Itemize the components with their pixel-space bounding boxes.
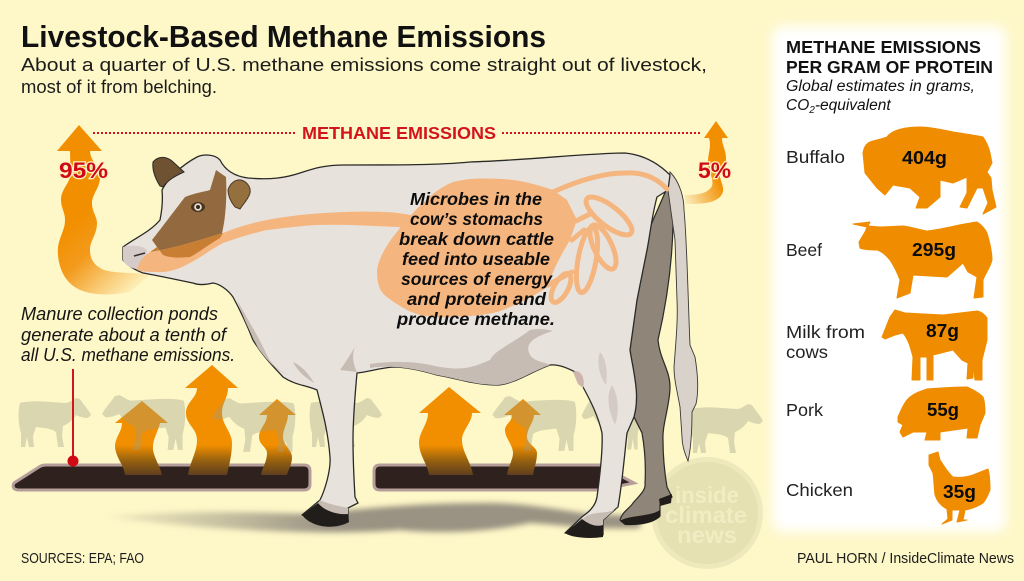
text: microbes in the stomachs: and protein and — [407, 289, 546, 309]
subtitle — [21, 54, 707, 97]
row: pork: Pork — [786, 400, 823, 420]
watermark: InsideClimate News — [651, 457, 763, 569]
panel heading: 2 — [808, 105, 815, 116]
row: buffalo — [786, 127, 996, 214]
panel heading: PER GRAM OF PROTEIN — [786, 57, 993, 77]
row: buffalo: Buffalo — [786, 147, 845, 167]
panel heading: Global estimates in grams, — [786, 78, 975, 95]
manure pond: left — [13, 465, 310, 490]
row: chicken: 35g — [943, 482, 976, 502]
near hind hoof — [565, 519, 603, 538]
text: microbes in the stomachs — [396, 189, 555, 329]
callout pointer to pond — [68, 369, 78, 466]
background cow herd — [19, 395, 763, 453]
far hind leg and rump shade — [620, 188, 673, 523]
row: chicken: Chicken — [786, 480, 853, 500]
cow body — [123, 153, 670, 535]
row: milk from cows: 87g — [926, 321, 959, 341]
brown head patch — [152, 170, 226, 258]
text: manure collection ponds: all U.S. methane emissions. — [21, 345, 235, 365]
tail — [668, 172, 698, 461]
panel heading: CO — [786, 97, 809, 114]
text: microbes in the stomachs: produce methane. — [396, 309, 555, 329]
label: 5%: 5% — [698, 158, 731, 183]
left ear — [153, 157, 184, 187]
watermark: InsideClimate News: climate — [665, 502, 747, 528]
title: Livestock-Based Methane Emissions — [21, 19, 546, 54]
far hoof — [620, 494, 672, 525]
label: methane emissions with dotted rule: METHANE EMISSIONS — [302, 123, 496, 143]
row: beef: 295g — [912, 240, 956, 260]
row: pork — [786, 387, 985, 440]
row: milk from cows: cows — [786, 342, 828, 362]
panel: methane emissions per gram of protein — [772, 26, 1006, 532]
near front hoof — [302, 503, 349, 527]
panel heading: METHANE EMISSIONS — [786, 37, 981, 57]
watermark: InsideClimate News: news — [677, 522, 737, 548]
cow illustration — [123, 153, 698, 538]
panel glow — [772, 26, 1006, 532]
digestive tract — [137, 178, 577, 317]
ground shadow — [107, 503, 640, 532]
row: beef — [786, 222, 992, 298]
row: milk from cows: Milk from — [786, 322, 865, 342]
watermark: InsideClimate News: inside — [675, 482, 739, 508]
text: manure collection ponds: Manure collection ponds — [21, 304, 218, 324]
text: microbes in the stomachs: Microbes in the — [410, 189, 542, 209]
row: chicken — [786, 452, 990, 524]
eye — [191, 202, 205, 212]
row: beef: Beef — [786, 240, 822, 260]
text: microbes in the stomachs: sources of energy — [401, 269, 553, 289]
right ear — [228, 180, 250, 209]
text: manure collection ponds — [21, 304, 235, 365]
methane arrows rising from ponds — [115, 365, 541, 475]
row: pork: 55g — [927, 400, 959, 420]
muzzle — [123, 246, 147, 269]
text: manure collection ponds: generate about a tenth of — [21, 325, 228, 345]
text: microbes in the stomachs: break down cattle — [399, 229, 554, 249]
label: 95%: 95% — [59, 158, 108, 183]
footer: sources: SOURCES: EPA; FAO — [21, 551, 144, 567]
intestine loops — [547, 173, 667, 305]
manure pond: right — [374, 465, 634, 490]
footer: credit: PAUL HORN / InsideClimate News — [797, 551, 1014, 567]
row: milk from cows — [786, 310, 987, 380]
text: microbes in the stomachs: feed into useable — [402, 249, 550, 269]
nostril — [134, 253, 145, 256]
panel heading — [786, 37, 993, 116]
panel heading: -equivalent — [815, 97, 891, 114]
arrow: 5 percent from the rear — [685, 121, 728, 204]
text: microbes in the stomachs: cow’s stomachs — [410, 209, 543, 229]
row: buffalo: 404g — [902, 148, 947, 168]
subtitle: most of it from belching. — [21, 76, 217, 97]
subtitle: About a quarter of U.S. methane emissions come straight out of livestock, — [21, 54, 707, 75]
arrow: 95 percent belching — [57, 125, 150, 294]
body shading — [237, 300, 618, 528]
